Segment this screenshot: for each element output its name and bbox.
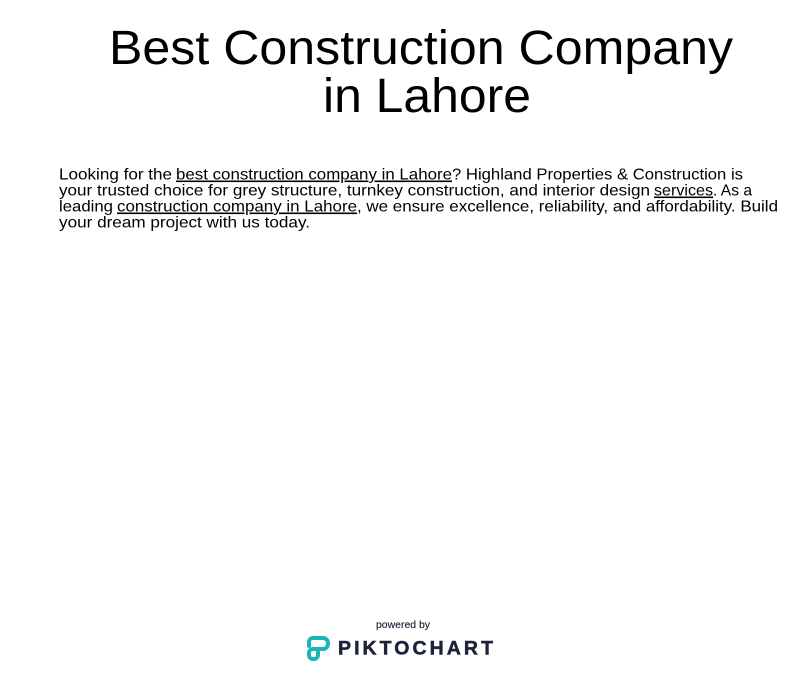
body paragraph: ? Highland Properties & Construction is	[452, 166, 743, 184]
body paragraph: Looking for the	[59, 166, 172, 184]
body paragraph: leading	[59, 198, 113, 216]
icon: piktochart P mark	[309, 638, 328, 659]
body paragraph: your trusted choice for grey structure, turnkey construction, and interior design	[59, 182, 650, 200]
title: Best Construction Company	[109, 22, 733, 75]
body paragraph	[59, 166, 778, 232]
body paragraph: , we ensure excellence, reliability, and affordability. Build	[357, 198, 778, 216]
piktochart logo	[309, 638, 493, 660]
title	[109, 22, 733, 123]
body paragraph: your dream project with us today.	[59, 214, 310, 232]
body paragraph: services	[654, 182, 713, 200]
wordmark: PIKTOCHART	[338, 638, 493, 660]
body paragraph: best construction company in Lahore	[176, 166, 452, 184]
title: in Lahore	[323, 70, 531, 123]
body paragraph: construction company in Lahore	[117, 198, 357, 216]
body paragraph: . As a	[713, 182, 752, 200]
powered by label: powered by	[376, 619, 431, 631]
